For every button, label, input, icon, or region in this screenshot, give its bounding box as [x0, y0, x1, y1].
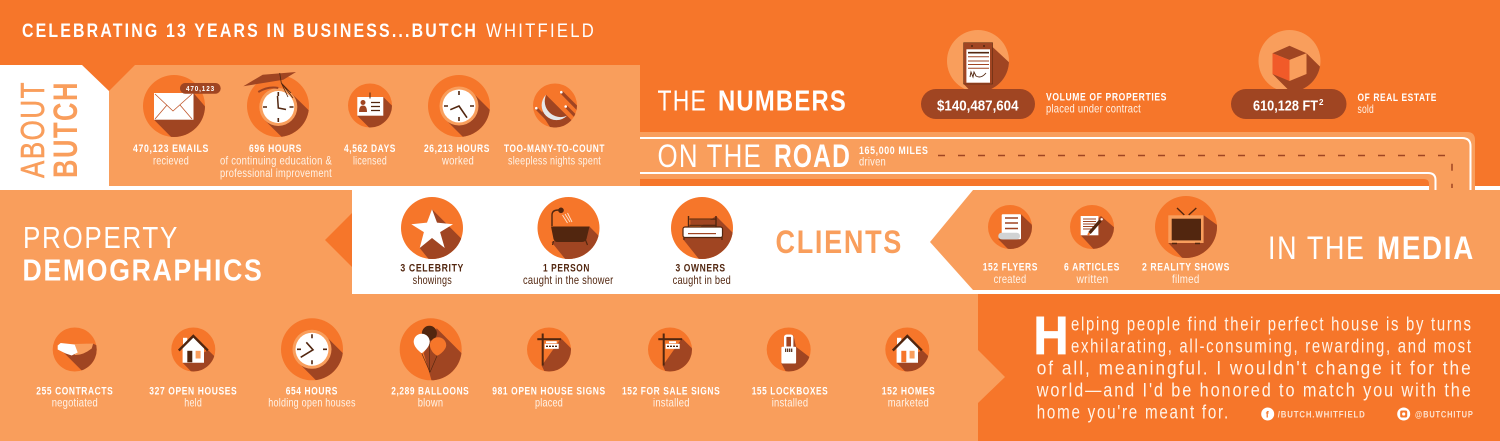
stat: for sale signs: 152 FOR SALE SIGNS: [622, 385, 720, 397]
road centre dashes: [938, 156, 1452, 188]
icon: star: [401, 197, 463, 259]
heading: property demographics: [22, 220, 264, 288]
stat: caught in bed: [673, 263, 731, 287]
stat: holding open houses: holding open houses: [268, 396, 356, 410]
heading: the numbers: [658, 86, 847, 118]
heading: clients: CLIENTS: [776, 224, 903, 260]
stat: contracts: [36, 385, 113, 410]
icon: moon and stars: [533, 84, 577, 128]
panel: bottom statistics band: [0, 294, 1005, 441]
panel: property demographics band: [0, 190, 352, 294]
stat: real estate sold: sold: [1358, 102, 1374, 116]
road edge lines: [640, 138, 1470, 190]
stat: hours worked: worked: [441, 154, 474, 168]
callout: square feet pill: 2: [1319, 98, 1324, 107]
icon: clock with graduation cap: [244, 72, 309, 137]
stat: open houses: 327 OPEN HOUSES: [149, 385, 237, 397]
stat: homes marketed: [882, 385, 935, 410]
stat: lockboxes: [752, 385, 828, 410]
heading: in the media: [1268, 230, 1475, 266]
text block: closing statement: H: [1034, 306, 1068, 366]
stat: open houses: held: [184, 396, 202, 410]
stat: education hours: of continuing education &: [220, 154, 332, 168]
stat: holding open houses: [268, 385, 356, 410]
icon: contract notepad: [947, 30, 1009, 89]
stat: caught in shower: 1 PERSON: [543, 263, 590, 275]
stat: volume of properties: VOLUME OF PROPERTIES: [1046, 92, 1167, 104]
stat: balloons: blown: [418, 396, 443, 410]
stat: homes marketed: marketed: [888, 396, 929, 410]
heading: property demographics: PROPERTY: [23, 220, 179, 255]
icon: lockbox: [766, 328, 811, 372]
social: facebook: f: [1266, 410, 1270, 420]
panel: about butch white tab: [0, 65, 109, 186]
icon: handshake: [52, 328, 97, 372]
stat: reality shows: [1142, 262, 1230, 286]
stat: celebrity showings: 3 CELEBRITY: [400, 263, 464, 275]
heading: in the media: MEDIA: [1377, 230, 1475, 266]
stat: reality shows: filmed: [1172, 272, 1200, 286]
stat: articles written: 6 ARTICLES: [1064, 262, 1120, 274]
panel: about butch stats: [109, 65, 640, 186]
stat: days licensed: licensed: [353, 154, 387, 168]
stat: contracts: 255 CONTRACTS: [36, 385, 113, 397]
callout: square feet pill: 610,128 FT: [1253, 98, 1318, 114]
icon: email: [143, 75, 221, 137]
stat: real estate sold: [1358, 92, 1437, 116]
stat: articles written: [1064, 262, 1120, 286]
stat: emails: recieved: [153, 154, 189, 168]
stat: open house signs: 981 OPEN HOUSE SIGNS: [492, 385, 606, 397]
social: instagram: [1397, 408, 1474, 420]
icon: open house: [171, 328, 216, 372]
icon: shower bathtub: [538, 197, 600, 259]
stat: flyers created: [983, 262, 1038, 286]
stat: flyers created: 152 FLYERS: [983, 262, 1038, 274]
stat: holding open houses: 654 HOURS: [286, 385, 338, 397]
stat: caught in bed: caught in bed: [673, 273, 731, 287]
stat: volume of properties: [1046, 92, 1167, 116]
stat: balloons: 2,289 BALLOONS: [391, 385, 469, 397]
stat: celebrity showings: [400, 263, 464, 287]
stat: lockboxes: installed: [772, 396, 808, 410]
stat: real estate sold: OF REAL ESTATE: [1358, 92, 1437, 104]
title: WHITFIELD: [486, 21, 596, 42]
icon: email: 470,123: [186, 84, 215, 93]
heading: the numbers: NUMBERS: [718, 86, 847, 118]
stat: volume of properties: placed under contract: [1046, 102, 1141, 116]
social: facebook: /BUTCH.WHITFIELD: [1278, 409, 1366, 419]
icon: cube: [1258, 30, 1320, 89]
stat: days licensed: [344, 143, 396, 168]
heading: property demographics: DEMOGRAPHICS: [22, 252, 264, 288]
heading: about butch: ABOUT: [14, 81, 51, 178]
panel: road band: [640, 132, 1475, 190]
icon: marketed home: [885, 328, 930, 372]
stat: contracts: negotiated: [52, 396, 98, 410]
stat: miles driven: 165,000 MILES: [859, 145, 928, 157]
stat: caught in shower: [523, 263, 614, 287]
stat: education hours: [220, 143, 332, 180]
stat: balloons: [391, 385, 469, 410]
stat: celebrity showings: showings: [413, 273, 452, 287]
heading: on the road: ON THE: [658, 138, 762, 174]
stat: miles driven: driven: [859, 155, 886, 169]
panel: in the media: [930, 190, 1500, 290]
text block: closing statement: home you're meant for.: [1037, 403, 1230, 424]
stat: emails: [133, 143, 209, 168]
heading: the numbers: THE: [658, 86, 707, 118]
icon: for sale sign: [648, 328, 692, 372]
stat: miles driven: [859, 145, 928, 169]
icon: balloons: [400, 318, 462, 380]
stat: hours worked: 26,213 HOURS: [424, 143, 490, 155]
stat: caught in bed: 3 OWNERS: [676, 263, 726, 275]
stat: homes marketed: 152 HOMES: [882, 385, 935, 397]
stat: reality shows: 2 REALITY SHOWS: [1142, 262, 1230, 274]
icon: flyer scroll: [988, 205, 1032, 249]
callout: volume pill: $140,487,604: [937, 98, 1019, 114]
stat: lockboxes: 155 LOCKBOXES: [752, 385, 828, 397]
heading: on the road: ROAD: [774, 138, 851, 174]
heading: on the road: [658, 138, 851, 174]
icon: article and pencil: [1070, 205, 1114, 249]
stat: emails: 470,123 EMAILS: [133, 143, 209, 155]
icon: bed: [671, 197, 733, 259]
stat: sleepless nights: sleepless nights spent: [508, 154, 601, 168]
stat: sleepless nights: [504, 143, 605, 168]
stat: hours worked: [424, 143, 490, 168]
stat: education hours: 696 HOURS: [249, 143, 302, 155]
icon: television: [1155, 196, 1217, 258]
stat: for sale signs: [622, 385, 720, 410]
callout: volume pill: [921, 89, 1035, 119]
stat: articles written: written: [1076, 272, 1108, 286]
icon: clock, open house hours: [281, 318, 343, 380]
stat: open houses: [149, 385, 237, 410]
stat: flyers created: created: [994, 272, 1026, 286]
heading: in the media: IN THE: [1268, 230, 1366, 266]
icon: license card: [348, 84, 392, 128]
stat: sleepless nights: TOO-MANY-TO-COUNT: [504, 143, 605, 155]
stat: education hours: professional improvement: [220, 166, 332, 180]
heading: about butch: [14, 81, 85, 178]
heading: about butch: BUTCH: [47, 81, 85, 178]
stat: open house signs: placed: [535, 396, 563, 410]
callout: square feet pill: [1231, 89, 1346, 119]
stat: caught in shower: caught in the shower: [523, 273, 614, 287]
title: CELEBRATING 13 YEARS IN BUSINESS...BUTCH: [22, 21, 478, 42]
text block: closing statement: [1034, 306, 1473, 424]
stat: open house signs: [492, 385, 606, 410]
icon: open house sign: [527, 328, 571, 372]
social: instagram: @BUTCHITUP: [1415, 409, 1474, 419]
stat: for sale signs: installed: [653, 396, 690, 410]
icon: clock: [428, 75, 490, 137]
stat: days licensed: 4,562 DAYS: [344, 143, 396, 155]
social: facebook: [1261, 408, 1366, 420]
